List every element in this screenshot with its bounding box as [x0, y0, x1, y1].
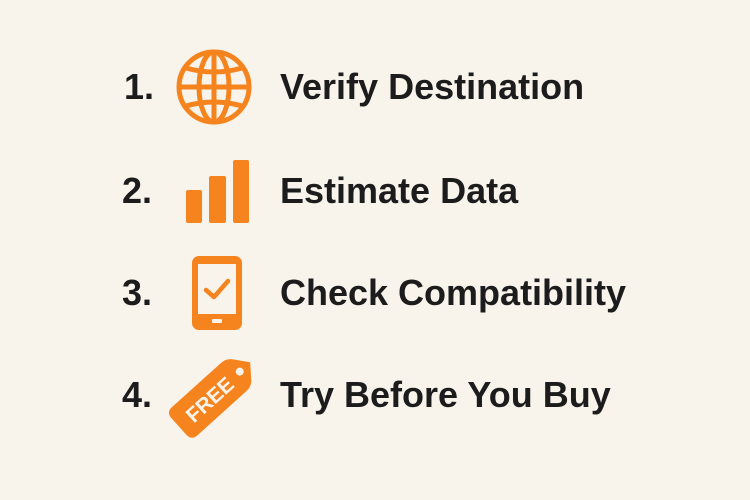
- icon: phone with check: [192, 256, 242, 330]
- number 2: 2.: [122, 170, 152, 211]
- icon: signal bars: [186, 160, 249, 223]
- number 4: 4.: [122, 374, 152, 415]
- heading: Check Compatibility: Check Compatibility: [280, 272, 626, 313]
- icon: globe: [179, 52, 249, 122]
- icon: FREE tag: FREE: [182, 373, 239, 427]
- icon: FREE tag: [166, 348, 263, 441]
- number 1: 1.: [124, 66, 154, 107]
- heading: Estimate Data: Estimate Data: [280, 170, 518, 211]
- heading: Verify Destination: Verify Destination: [280, 66, 584, 107]
- number 3: 3.: [122, 272, 152, 313]
- heading: Try Before You Buy: Try Before You Buy: [280, 374, 611, 415]
